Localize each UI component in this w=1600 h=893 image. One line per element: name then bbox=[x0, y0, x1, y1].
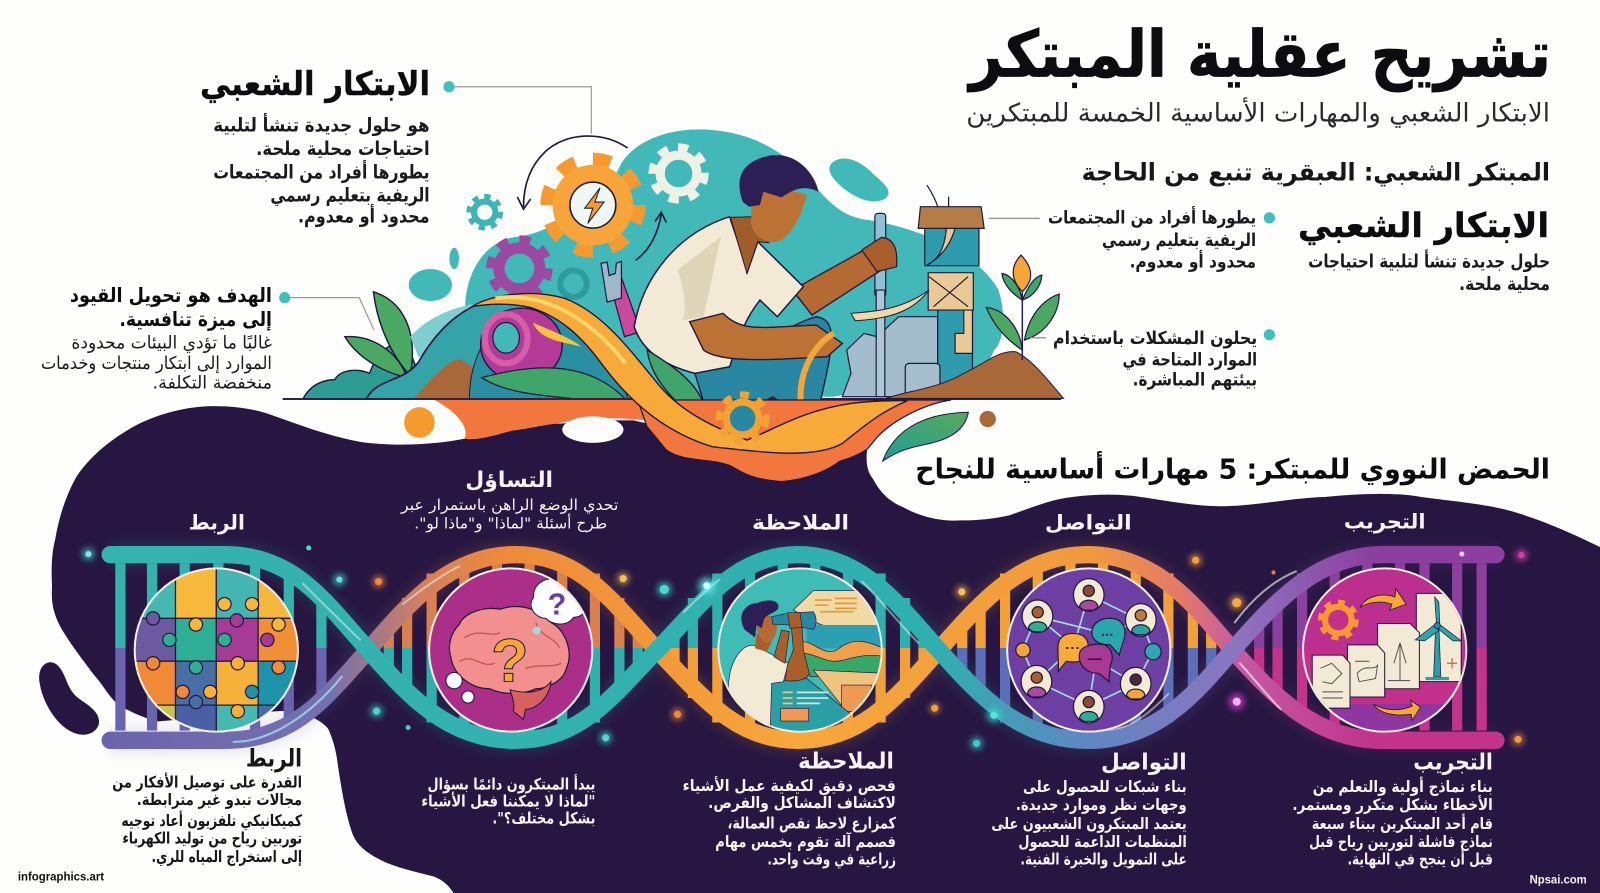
description: نماذج فاشلة لتوربين رياح قبل bbox=[1309, 832, 1493, 851]
description: مجالات تبدو غير مترابطة. bbox=[137, 790, 302, 809]
description bbox=[1292, 776, 1493, 869]
icon: brain circle (questioning): ? bbox=[491, 627, 529, 695]
white hole in dark bbox=[562, 416, 623, 443]
description: يعتمد المبتكرون الشعبيون على bbox=[991, 814, 1187, 833]
text: محدود أو معدوم. bbox=[1130, 249, 1256, 272]
description: الريفية بتعليم رسمي bbox=[270, 185, 430, 207]
ground hill and plants left bbox=[303, 292, 635, 410]
brown dot bbox=[980, 411, 996, 427]
icon: main orange gear with lightning bbox=[548, 160, 638, 250]
icon: white gear bbox=[653, 148, 704, 199]
icon: wrench bbox=[601, 261, 641, 337]
panel: questioning details bbox=[421, 773, 595, 827]
panel: observation details bbox=[683, 748, 897, 869]
icon: puzzle circle (connecting) bbox=[133, 567, 300, 733]
pants bbox=[695, 317, 832, 430]
plant bbox=[1021, 283, 1023, 360]
small orange gear bbox=[719, 395, 766, 442]
highlights bbox=[234, 566, 1296, 742]
foreground leaf bbox=[647, 350, 712, 430]
description: منخفضة التكلفة. bbox=[153, 372, 272, 393]
text bbox=[1048, 205, 1256, 272]
near arm bbox=[690, 313, 842, 360]
description: القدرة على توصيل الأفكار من bbox=[112, 772, 302, 791]
orange ribbon bbox=[435, 400, 951, 482]
description bbox=[683, 776, 897, 869]
heading: إلى ميزة تنافسية. bbox=[119, 308, 272, 331]
label: questioning: طرح أسئلة "لماذا" و"ماذا لو". bbox=[414, 514, 607, 534]
text: الريفية بتعليم رسمي bbox=[1102, 230, 1256, 251]
description bbox=[213, 113, 430, 227]
subtitle: الابتكار الشعبي والمهارات الأساسية الخمسة للمبتكرين bbox=[966, 95, 1550, 128]
panel: right definition bbox=[1298, 206, 1550, 295]
label: communication: التواصل bbox=[1045, 511, 1132, 535]
description: كمزارع لاحظ نقص العمالة، bbox=[728, 814, 897, 833]
face bbox=[751, 190, 807, 242]
person bbox=[634, 155, 1064, 430]
hair bbox=[739, 155, 818, 207]
illustration: innovator at work bbox=[283, 129, 1064, 482]
strand glow bbox=[110, 555, 1496, 740]
description: بناء نماذج أولية والتعلم من bbox=[1313, 776, 1493, 796]
description: هو حلول جديدة تنشأ لتلبية bbox=[213, 113, 430, 137]
description bbox=[112, 772, 303, 867]
teal background blob bbox=[409, 129, 1003, 397]
heading: التواصل bbox=[1101, 749, 1187, 775]
heading: الابتكار الشعبي bbox=[1298, 206, 1549, 245]
callout: available resources bbox=[1031, 328, 1275, 391]
panel: goal callout bbox=[41, 284, 374, 393]
skill labels over helix bbox=[189, 468, 1426, 535]
heading: الملاحظة bbox=[798, 748, 894, 774]
connector and dot bbox=[1031, 329, 1275, 340]
description: الموارد إلى ابتكار منتجات وخدمات bbox=[41, 353, 272, 374]
description: المنظمات الداعمة للحصول bbox=[1018, 832, 1187, 851]
description: لاكتشاف المشاكل والفرص. bbox=[708, 793, 896, 812]
ground line bbox=[283, 398, 1061, 400]
section heading: five skills: الحمض النووي للمبتكر: 5 مهارات أساسية للنجاح bbox=[915, 451, 1550, 486]
description: الأخطاء بشكل متكرر ومستمر. bbox=[1292, 795, 1493, 814]
description: إلى استخراج المياه للري. bbox=[152, 847, 302, 867]
title: تشريح عقلية المبتكر bbox=[967, 18, 1551, 93]
description bbox=[1308, 249, 1550, 295]
panel: experimenting details bbox=[1292, 749, 1493, 869]
strand A bbox=[110, 555, 1496, 740]
section heading: المبتكر الشعبي: العبقرية تنبع من الحاجة bbox=[1082, 158, 1550, 187]
orange dot bbox=[404, 407, 435, 438]
icon: brain circle (questioning) bbox=[428, 567, 593, 733]
connector and dot bbox=[443, 81, 591, 134]
strand B bbox=[110, 555, 1496, 740]
description: احتياجات محلية ملحة. bbox=[256, 138, 430, 160]
icon: observer circle (observation) bbox=[717, 567, 883, 733]
description: غالبًا ما تؤدي البيئات محدودة bbox=[71, 332, 272, 353]
label: experimenting: التجريب bbox=[1344, 510, 1426, 534]
panel: top-left definition bbox=[200, 65, 591, 227]
description: بناء شبكات للحصول على bbox=[1023, 777, 1187, 796]
leaf decoration bbox=[883, 412, 968, 461]
description bbox=[991, 777, 1187, 868]
heading: الهدف هو تحويل القيود bbox=[70, 284, 272, 307]
credit: infographics.art: infographics.art bbox=[18, 871, 104, 884]
shirt bbox=[634, 217, 803, 373]
right soil bbox=[886, 352, 1064, 398]
heading: التجريب bbox=[1413, 749, 1493, 775]
neck bbox=[730, 217, 769, 273]
yellow ribbon bbox=[472, 293, 907, 453]
icon: purple gear bbox=[491, 240, 548, 297]
sparkles bbox=[82, 545, 1528, 750]
upper hand bbox=[862, 237, 897, 272]
label: questioning bbox=[400, 468, 618, 534]
description bbox=[41, 332, 272, 393]
label: observation: الملاحظة bbox=[752, 511, 849, 535]
description: وجهات نظر وموارد جديدة. bbox=[1016, 795, 1187, 814]
heading bbox=[70, 284, 272, 331]
far arm bbox=[792, 250, 881, 315]
pump and machine bbox=[842, 185, 984, 397]
label: questioning: تحدي الوضع الراهن باستمرار عبر bbox=[400, 496, 618, 515]
panel: questioning details: يبدأ المبتكرون دائمًا بسؤال bbox=[428, 773, 595, 793]
description: فصمم آلة تقوم بخمس مهام bbox=[715, 831, 896, 851]
panel: questioning details: بشكل مختلف؟". bbox=[492, 808, 595, 827]
label: connecting: الربط bbox=[189, 511, 245, 535]
heading: الابتكار الشعبي bbox=[200, 65, 430, 103]
connector and dot bbox=[989, 212, 1275, 223]
DNA helix bbox=[82, 545, 1528, 750]
arrows around gear bbox=[517, 136, 666, 260]
label: questioning: التساؤل bbox=[465, 468, 553, 493]
heading: الربط bbox=[246, 743, 302, 772]
callout: rural individuals bbox=[989, 205, 1275, 272]
description: محلية ملحة. bbox=[1459, 274, 1550, 295]
description: قبل أن ينجح في النهاية. bbox=[1347, 848, 1493, 869]
description: حلول جديدة تنشأ لتلبية احتياجات bbox=[1308, 249, 1550, 272]
description: على التمويل والخبرة الفنية. bbox=[1020, 849, 1187, 868]
hose and tool bbox=[801, 333, 834, 407]
description: كميكانيكي تلفزيون أعاد توجيه bbox=[121, 810, 303, 831]
description: قام أحد المبتكرين ببناء سبعة bbox=[1312, 813, 1493, 833]
panel: communication details bbox=[991, 749, 1187, 868]
text: بيئتهم المباشرة. bbox=[1133, 370, 1257, 391]
description: توربين رياح من توليد الكهرباء bbox=[122, 828, 302, 847]
icon: small teal gear bbox=[469, 197, 500, 228]
connector and dot bbox=[279, 292, 374, 330]
description: محدود أو معدوم. bbox=[298, 203, 430, 227]
credit: Npsai.com: Npsai.com bbox=[1530, 874, 1587, 887]
icon: faded gear bbox=[560, 270, 587, 297]
icon: network circle (communication) bbox=[1006, 567, 1171, 733]
text: يطورها أفراد من المجتمعات bbox=[1048, 205, 1256, 228]
icon: prototypes circle (experimenting) bbox=[1302, 567, 1467, 733]
icon: brain circle (questioning): ? bbox=[548, 587, 566, 621]
description: فحص دقيق لكيفية عمل الأشياء bbox=[683, 776, 896, 795]
text: يحلون المشكلات باستخدام bbox=[1053, 328, 1257, 349]
panel: questioning details: "لماذا لا يمكننا فعل الأشياء bbox=[421, 792, 595, 811]
description: يطورها أفراد من المجتمعات bbox=[213, 160, 430, 184]
text: الموارد المتاحة في bbox=[1122, 349, 1257, 370]
description: زراعية في وقت واحد. bbox=[767, 849, 896, 869]
rungs bbox=[120, 559, 1482, 737]
panel: connecting details bbox=[112, 743, 303, 867]
text bbox=[1053, 328, 1257, 391]
dark wave background shape bbox=[39, 406, 1600, 893]
